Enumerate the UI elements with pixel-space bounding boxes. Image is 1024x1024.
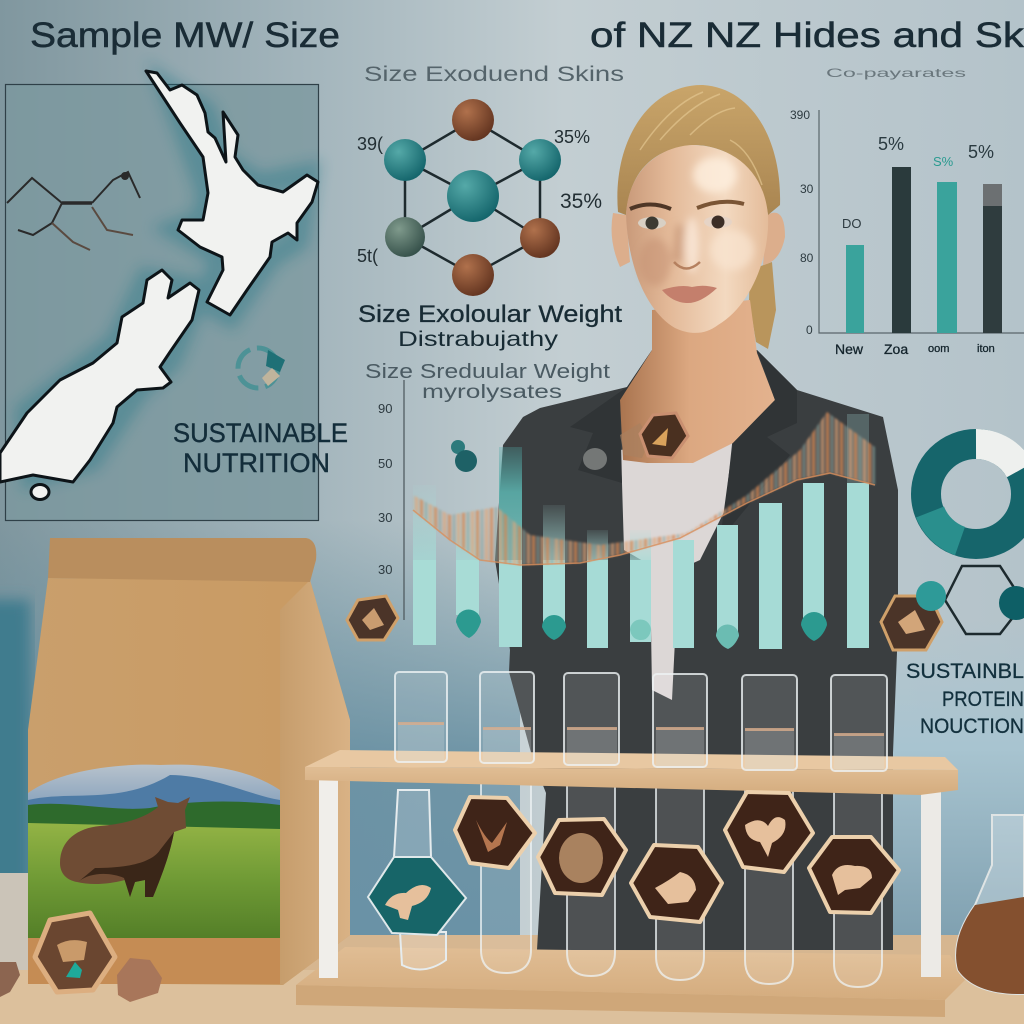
icon: recycle: [238, 348, 285, 388]
bar chart: top right: DO: [842, 216, 862, 231]
nose: [674, 262, 700, 268]
bar chart: top right: Co-payarates: [826, 66, 966, 80]
pendant: [583, 413, 688, 470]
chart: molecular weight bars: 90: [378, 401, 392, 416]
drops: [456, 610, 827, 649]
bar chart: top right: 80: [800, 251, 814, 265]
flask on rack: [368, 790, 466, 969]
eyes and brows: [630, 202, 744, 230]
icon: cow: [60, 797, 190, 897]
bar chart: top right: iton: [977, 343, 995, 355]
rack top shelf: [305, 750, 958, 795]
neck: [620, 300, 775, 463]
molecule diagram: 35%: [554, 127, 590, 147]
molecule diagram: [357, 99, 602, 296]
ponytail: [749, 262, 776, 349]
hexagon badges on tubes: [455, 792, 899, 922]
bar chart: top right: 5%: [968, 142, 994, 162]
molecule caption: Distrabujathy: [398, 328, 559, 351]
face shading: [639, 157, 754, 286]
hexagon badge: right: [881, 596, 942, 650]
label: sustainable protein: [906, 660, 1024, 738]
map: north island: [146, 71, 318, 315]
title: [30, 16, 1024, 55]
bar chart: top right: New: [835, 341, 864, 357]
icon: small pieces: [0, 958, 162, 1002]
bag landscape: [28, 765, 280, 984]
bar chart: top right: oom: [928, 343, 949, 355]
title: Sample MW/ Size: [30, 16, 340, 55]
molecule diagram: 5t(: [357, 246, 378, 266]
bar chart: top right: 5%: [878, 134, 904, 154]
curve ribbon: [413, 412, 875, 565]
subheading: hydrolysates: myrolysates: [422, 382, 562, 403]
label: sustainable nutrition: SUSTAINABLE: [173, 418, 348, 448]
table surface: [0, 873, 1024, 1024]
test tube rack: [296, 672, 965, 1017]
title: of NZ NZ Hides and Sk: [590, 16, 1024, 55]
molecule diagram: 35%: [560, 190, 602, 213]
map: south island: [0, 270, 199, 482]
label: sustainable nutrition: [173, 418, 348, 478]
label: sustainable protein: SUSTAINBL: [906, 660, 1024, 683]
donut chart: [926, 444, 1024, 544]
rack posts: [319, 780, 941, 978]
face: [626, 145, 768, 333]
hair: [617, 85, 780, 215]
bars: [413, 414, 869, 649]
bar chart: top right: Zoa: [884, 341, 908, 357]
hexagon molecule: [916, 566, 1024, 634]
bar chart: top right: 390: [790, 108, 810, 122]
molecule caption: Size Exoloular Weight: [358, 301, 622, 328]
bar chart: top right: S%: [933, 154, 954, 169]
bar chart: top right: 0: [806, 323, 813, 337]
lower tubes: [481, 780, 882, 987]
brown liquid flask: [956, 815, 1024, 994]
molecule diagram: 39(: [357, 134, 383, 154]
tube liquid: [398, 722, 884, 770]
chart: molecular weight bars: 50: [378, 456, 392, 471]
panel: map: [0, 71, 348, 520]
chart: molecular weight bars: 30: [378, 562, 392, 577]
ears: [612, 213, 785, 267]
subheading: hydrolysates: [365, 361, 611, 403]
hair strands: [640, 92, 762, 185]
icon: glasses sketch: [7, 172, 140, 250]
bar chart: top right: [790, 66, 1024, 357]
bar chart: top right: 30: [800, 182, 814, 196]
map: stewart island: [31, 484, 49, 500]
shirt: [620, 435, 733, 700]
label: sustainable nutrition: NUTRITION: [183, 448, 330, 478]
chart: molecular weight bars: [378, 380, 875, 649]
hexagon badge: bottom of bag: [35, 913, 115, 992]
product bag: [28, 538, 350, 985]
woman: [495, 85, 898, 950]
rack base: [296, 947, 965, 1017]
mouth: [662, 286, 717, 303]
lapels: [570, 350, 797, 540]
subheading: hydrolysates: Size Sreduular Weight: [365, 361, 611, 383]
map glow: [27, 90, 307, 475]
molecule heading: Size Exoduend Skins: [364, 63, 624, 86]
hexagon badge: left: [347, 596, 398, 640]
chart: molecular weight bars: 30: [378, 510, 392, 525]
blazer: [495, 350, 898, 950]
upper tubes: [395, 672, 887, 771]
molecule caption: [358, 301, 622, 351]
